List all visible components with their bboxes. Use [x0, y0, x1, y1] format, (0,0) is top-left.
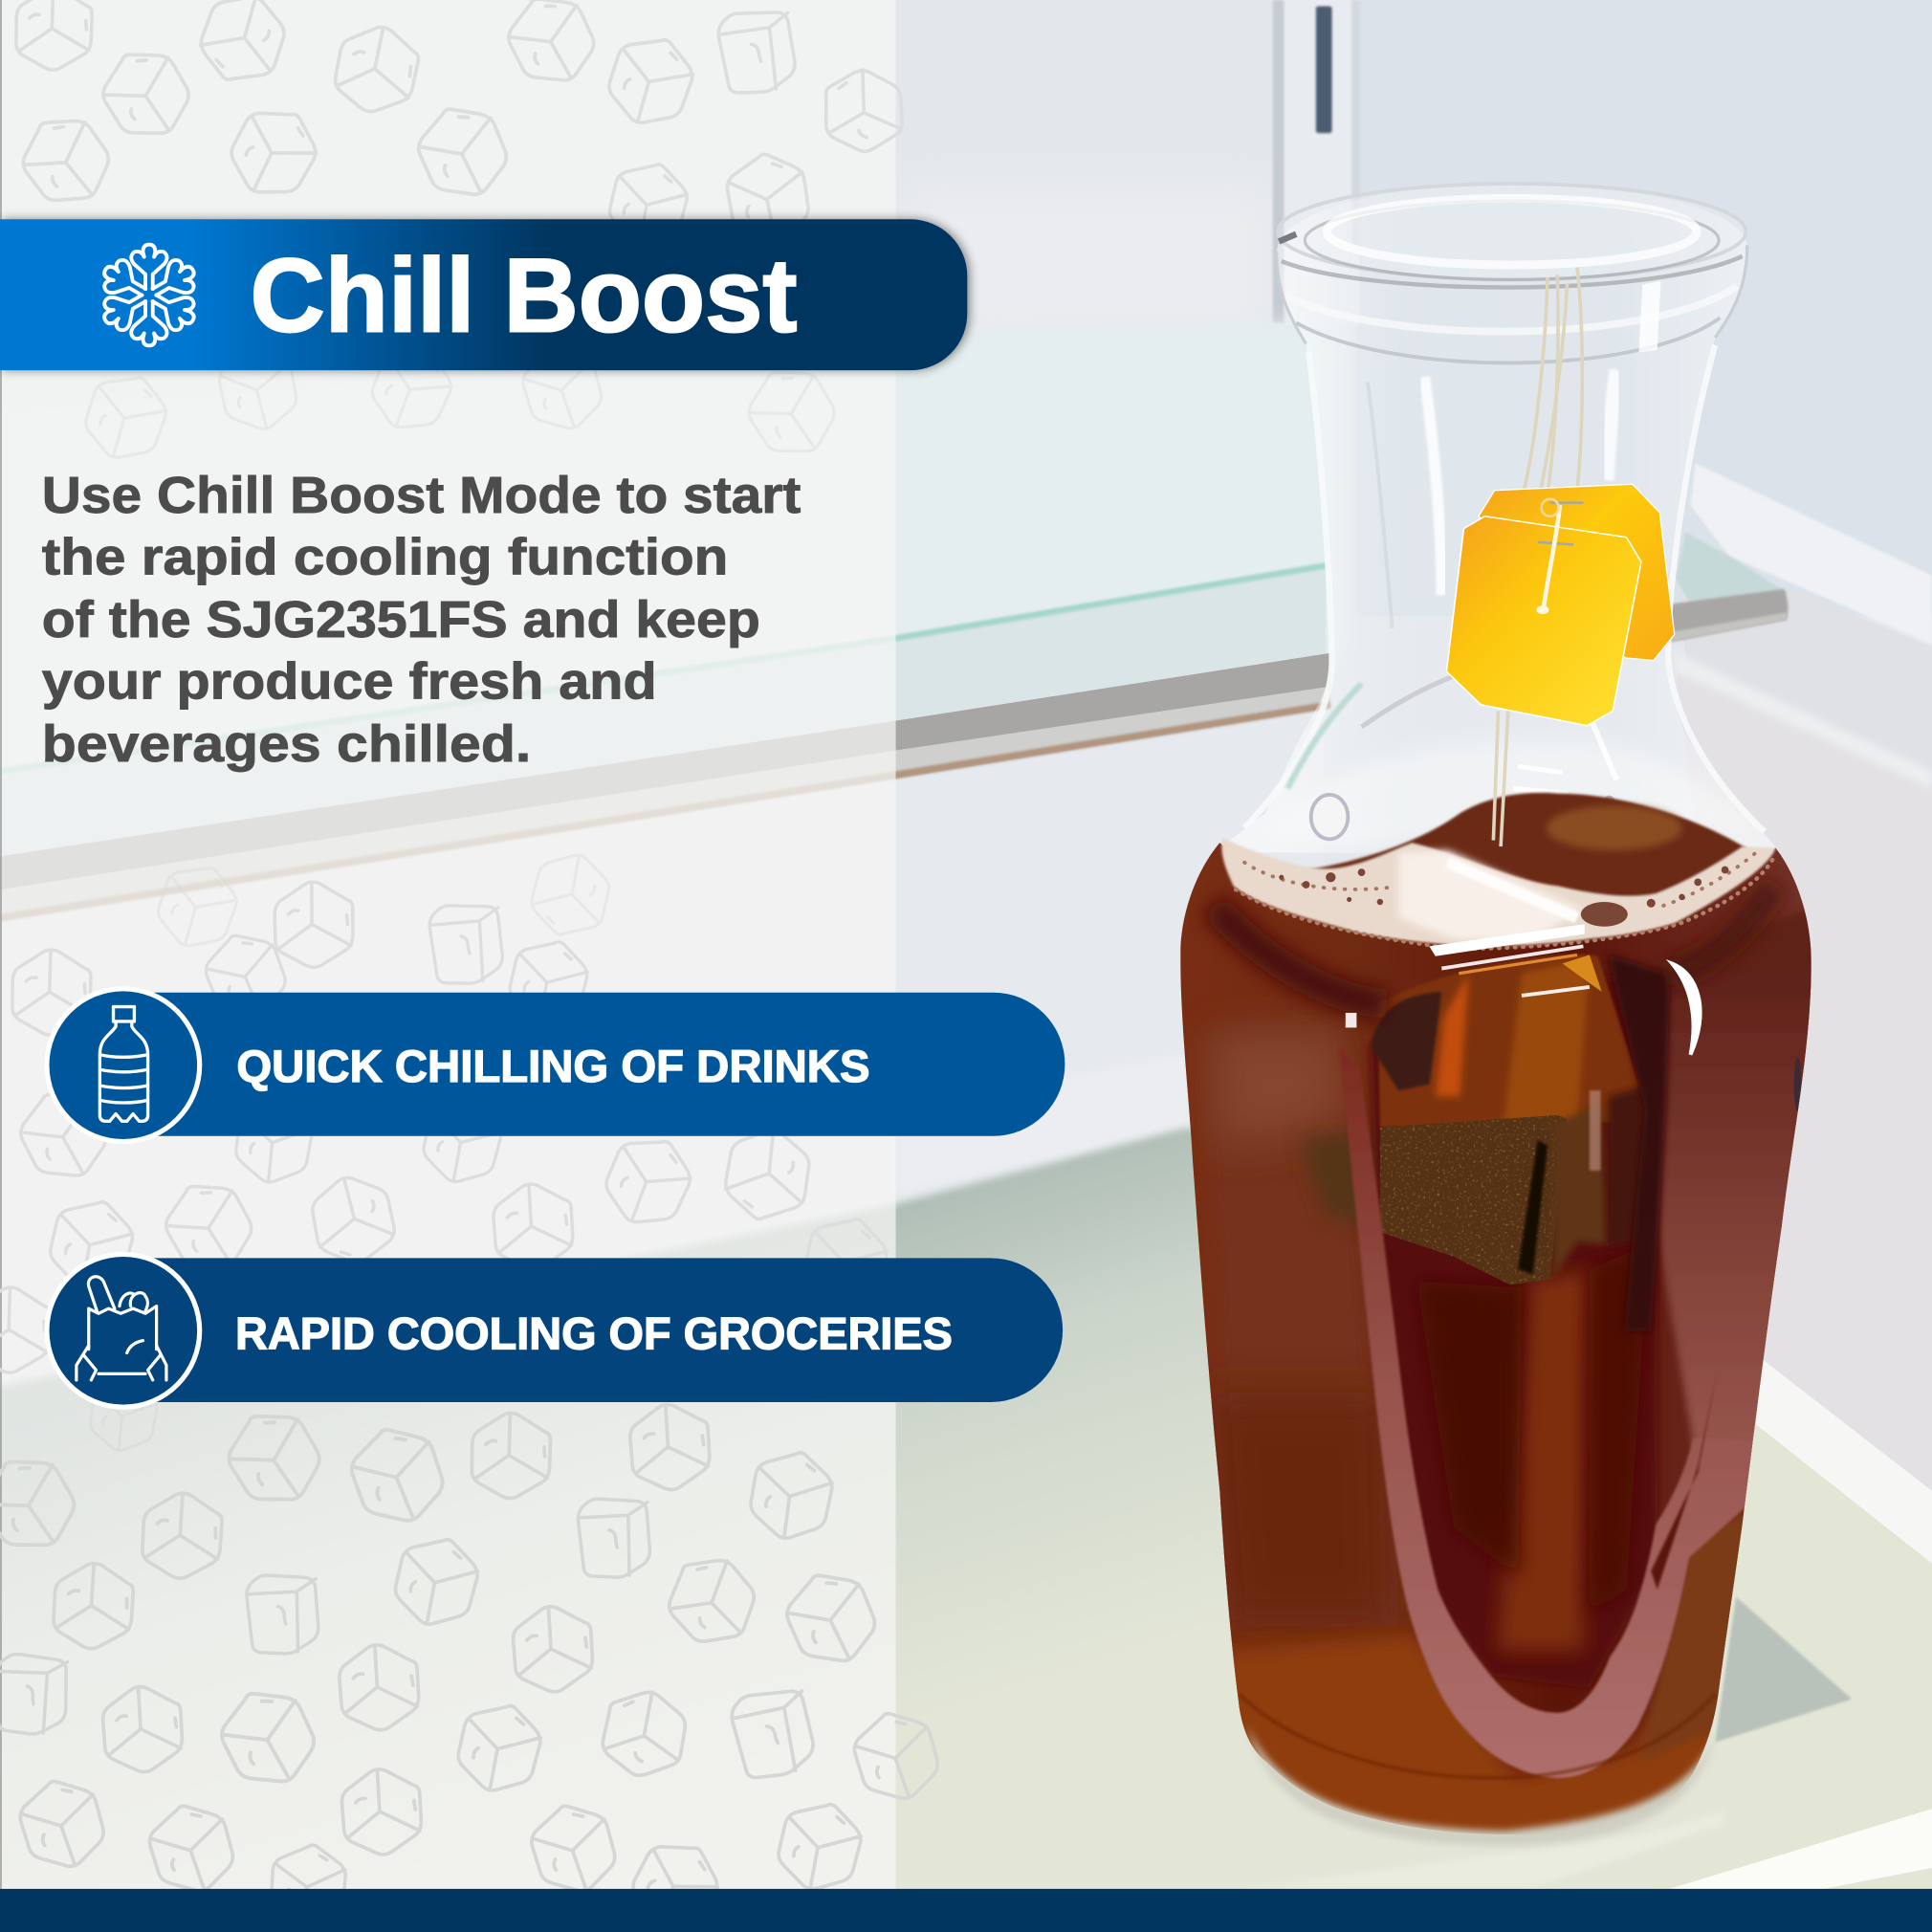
feature pill: quick chilling of drinks — [44, 986, 1065, 1144]
U reflection — [1339, 1047, 1765, 1778]
icon: water bottle — [99, 1007, 148, 1121]
description text: beverages chilled. — [42, 715, 531, 773]
tea tag: back — [1479, 484, 1675, 661]
glass shelf — [0, 323, 1343, 856]
description text: the rapid cooling function — [42, 528, 728, 585]
foam — [1221, 838, 1775, 956]
shelf floor — [0, 1128, 1932, 1889]
right dark band — [1608, 955, 1670, 1330]
photo: glass carafe of iced tea — [1158, 184, 1836, 1848]
tea tag strings — [1493, 268, 1582, 846]
feature pill: rapid cooling of groceries — [44, 1252, 1063, 1410]
right pink reflection — [1658, 907, 1811, 1486]
label: RAPID COOLING OF GROCERIES — [235, 1309, 953, 1360]
tea tag: front — [1446, 499, 1641, 726]
left lighter region — [1217, 1033, 1400, 1627]
footer bar — [0, 1889, 1932, 1932]
icon: snowflake — [97, 245, 202, 345]
dark interior — [1371, 976, 1666, 1688]
description text: your produce fresh and — [42, 652, 657, 710]
right side wall and bin — [1244, 463, 1932, 1889]
description text — [42, 467, 801, 773]
title: Chill Boost — [251, 238, 798, 355]
tea bag upper — [1377, 955, 1651, 1128]
lower rim lines — [1240, 1694, 1715, 1778]
description text: of the SJG2351FS and keep — [42, 591, 760, 648]
ice cube pattern — [0, 0, 945, 1932]
translucent left panel with ice cube pattern — [0, 0, 945, 1932]
lower right brown — [1638, 1509, 1749, 1762]
tea bag leaves — [1380, 1115, 1568, 1285]
metal shelf rail — [0, 589, 1788, 920]
label: QUICK CHILLING OF DRINKS — [236, 1042, 870, 1092]
tea surface — [1306, 793, 1749, 899]
carafe base glass — [1247, 1725, 1717, 1846]
orange lower band — [1219, 1633, 1725, 1848]
icon: grocery bag held by hands — [77, 1277, 166, 1380]
description text: Use Chill Boost Mode to start — [42, 467, 801, 524]
glass neck — [1214, 184, 1781, 852]
fridge door pillar — [1273, 0, 1360, 326]
liquid body — [1180, 843, 1811, 1834]
shoulder shadows and glints — [1214, 906, 1386, 1004]
header banner — [0, 219, 967, 370]
area below the shelf rail — [0, 705, 1325, 1405]
